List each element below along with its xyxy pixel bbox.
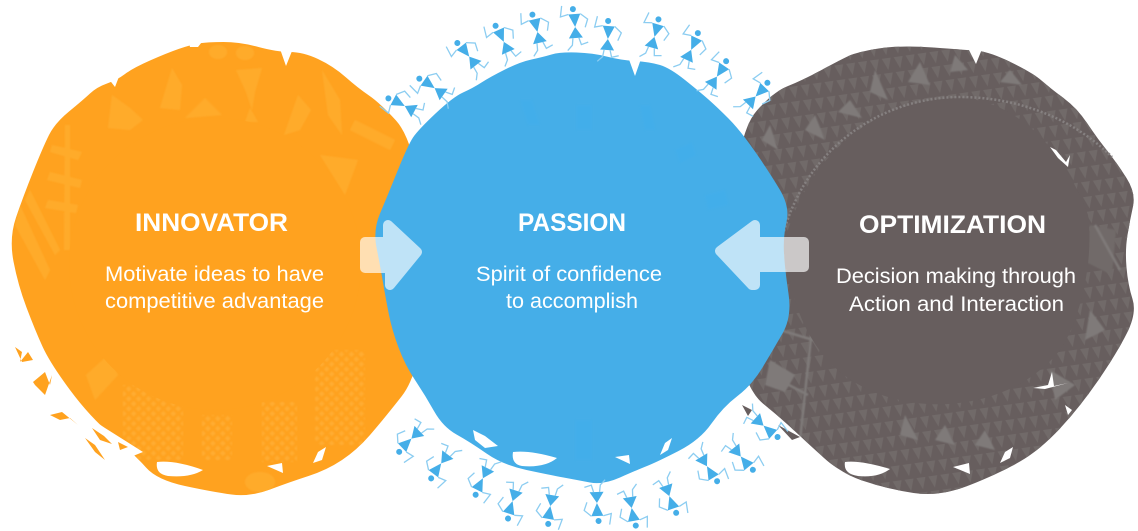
- panel: optimization: [732, 40, 1138, 500]
- brush marks: [520, 100, 728, 460]
- text: innovator description: [105, 263, 324, 313]
- paint splashes: [473, 54, 672, 466]
- flat centre: [69, 118, 361, 410]
- text: passion description: to accomplish: [506, 290, 638, 313]
- text: optimization description: Decision making through: [836, 265, 1076, 288]
- text: optimization description: Action and Interaction: [849, 293, 1064, 316]
- heading: innovator: INNOVATOR: [135, 209, 288, 237]
- dancers ring: [379, 4, 789, 531]
- dotted arc: [783, 97, 1112, 235]
- text: passion description: [476, 263, 662, 313]
- panel: innovator: [12, 38, 427, 495]
- paint splashes: [845, 44, 1072, 476]
- text: optimization description: [836, 265, 1076, 316]
- folk art motifs: [15, 45, 395, 492]
- arrow: optimization to passion: [720, 225, 804, 285]
- paint splashes: [108, 38, 326, 476]
- rock art texture: [740, 40, 1138, 500]
- heading: optimization: OPTIMIZATION: [859, 211, 1046, 239]
- blue brush circle: [375, 52, 789, 483]
- text: innovator description: competitive advantage: [105, 290, 324, 313]
- grey brush circle: [732, 46, 1134, 494]
- heading: passion: PASSION: [518, 209, 626, 237]
- arrow: innovator to passion: [365, 225, 417, 285]
- orange brush circle: [12, 42, 427, 495]
- text: innovator description: Motivate ideas to have: [105, 263, 324, 286]
- panel: passion: [375, 52, 789, 483]
- text: passion description: Spirit of confidence: [476, 263, 662, 286]
- flat centre: [785, 98, 1089, 404]
